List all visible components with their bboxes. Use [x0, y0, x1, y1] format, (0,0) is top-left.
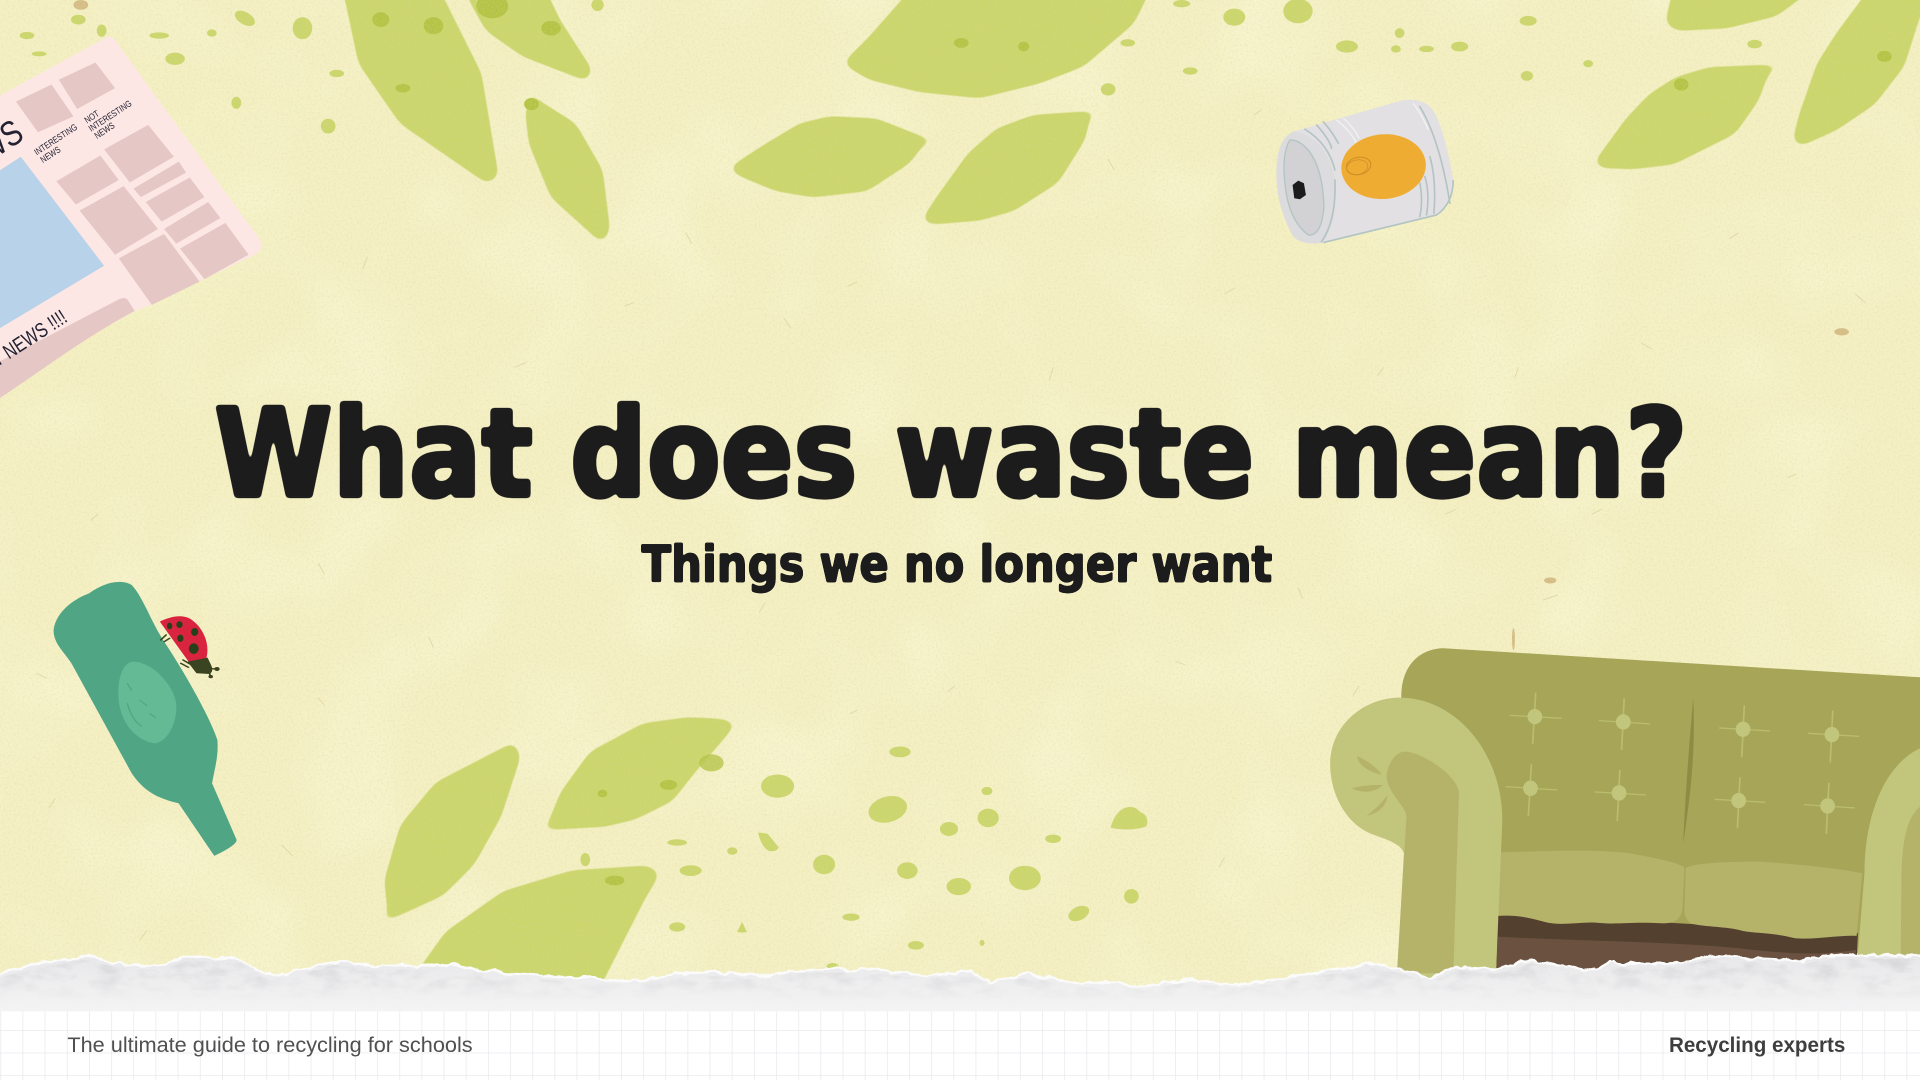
icon: old sofa: [1330, 648, 1920, 978]
icon: newspaper: NEWS: [38, 144, 63, 165]
icon: newspaper: INTERESTING: [86, 98, 134, 134]
title: What does waste mean?: [214, 382, 1687, 525]
footer right text: Recycling experts: [1669, 1034, 1845, 1057]
icon: green bottle with ladybug: [54, 582, 237, 856]
ladybug: [160, 616, 220, 678]
leaves: top centre cluster: [727, 0, 1157, 224]
leaves: bottom cluster: [371, 718, 737, 987]
bottle: [54, 582, 237, 856]
icon: newspaper: INTERESTING: [32, 121, 79, 157]
icon: newspaper: [0, 37, 261, 398]
leaves: top right cluster: [1593, 0, 1920, 169]
subtitle: Things we no longer want: [642, 535, 1272, 594]
footer left text: The ultimate guide to recycling for schools: [67, 1034, 473, 1057]
leaves: top left cluster: [338, 0, 610, 244]
torn paper edge: [0, 954, 1920, 1018]
footer strip: grid paper: [0, 1011, 1920, 1080]
icon: newspaper: NOT: [82, 108, 101, 126]
icon: newspaper: NEWS: [92, 119, 117, 141]
icon: crushed tin can: [1276, 100, 1453, 243]
button tufts: [1505, 693, 1859, 834]
